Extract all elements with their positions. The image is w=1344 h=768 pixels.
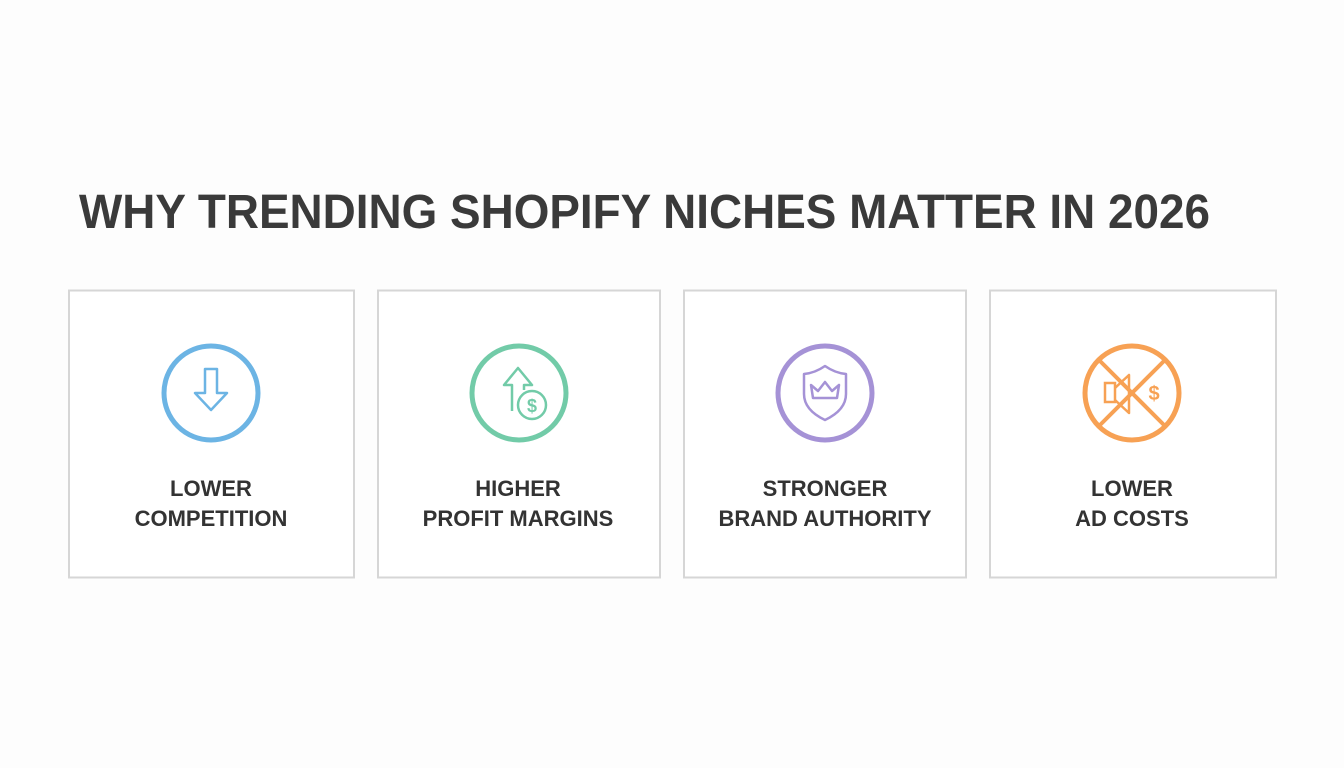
icon: arrow up with dollar [472, 346, 566, 440]
icon: crossed megaphone dollar: $ [1148, 383, 1160, 405]
panel: lower competition: COMPETITION [135, 506, 287, 531]
panel: lower ad costs: AD COSTS [1075, 506, 1189, 531]
label: HIGHER [475, 476, 561, 501]
icon: shield crown [778, 346, 872, 440]
panel: stronger brand authority [684, 290, 966, 578]
panel: lower ad costs [990, 290, 1276, 578]
icon: crossed megaphone dollar [1085, 346, 1179, 440]
panel: stronger brand authority: BRAND AUTHORITY [718, 506, 932, 531]
label: LOWER [1091, 476, 1173, 501]
panel: lower competition [69, 290, 354, 578]
panel: higher profit margins [378, 290, 660, 578]
icon: down arrow [164, 346, 258, 440]
label: STRONGER [763, 476, 887, 501]
label: LOWER [170, 476, 252, 501]
title: WHY TRENDING SHOPIFY NICHES MATTER IN 2026 [79, 186, 1210, 239]
icon: arrow up with dollar: $ [527, 396, 537, 416]
panel: higher profit margins: PROFIT MARGINS [423, 506, 613, 531]
